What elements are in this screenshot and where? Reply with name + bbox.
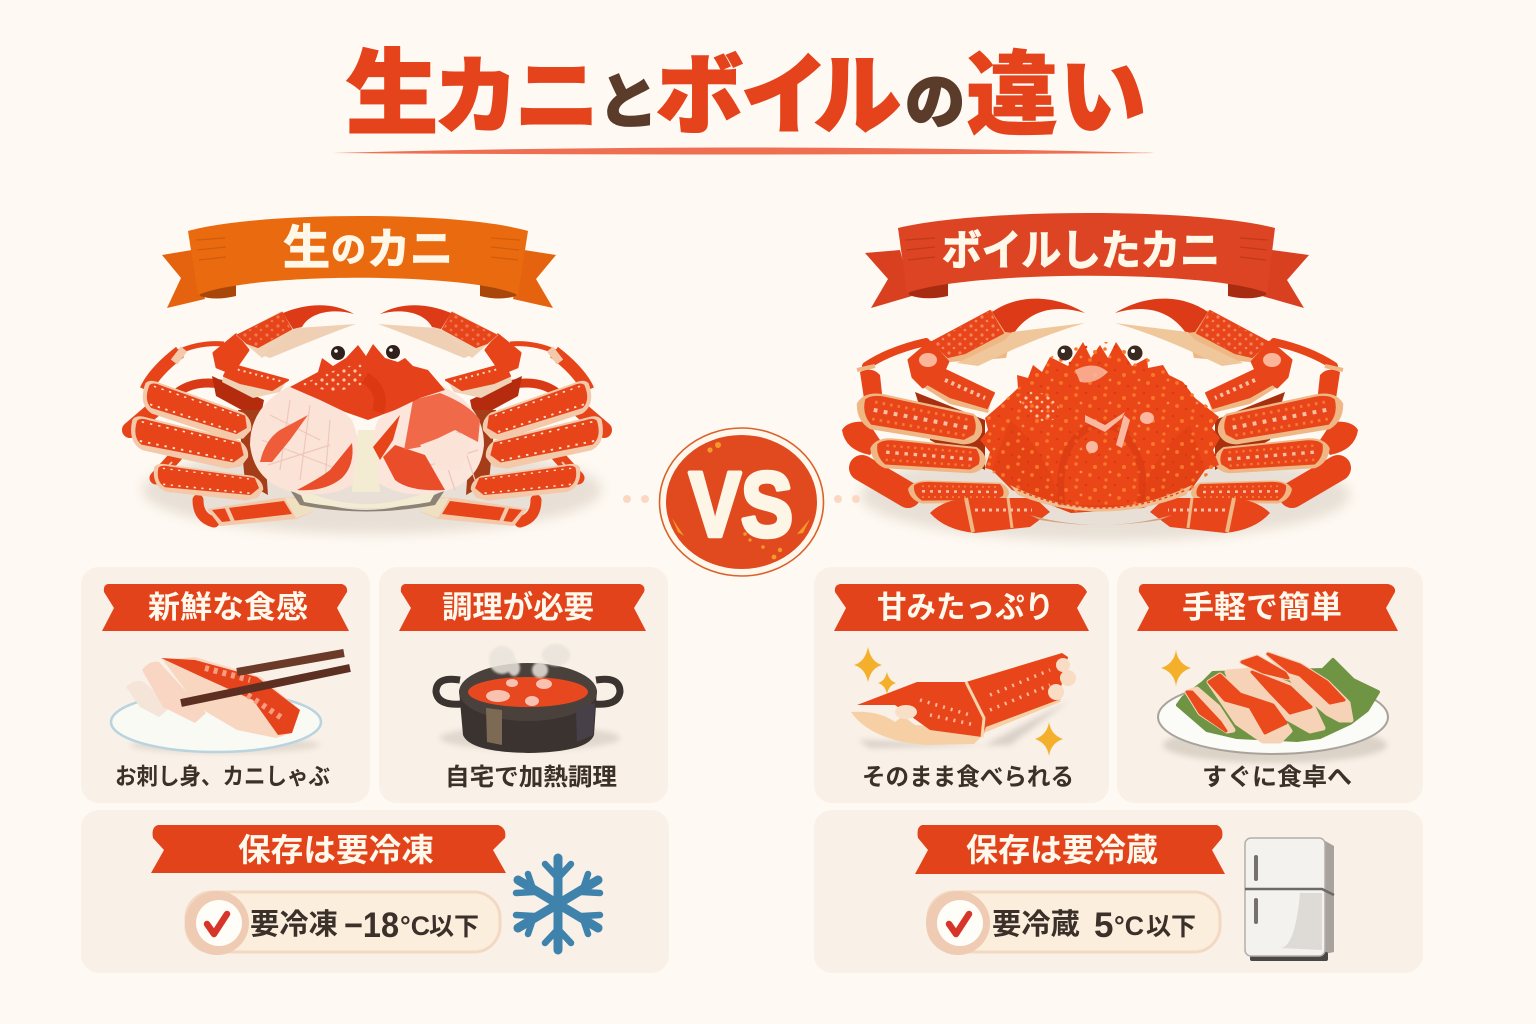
panel: fresh texture [81, 567, 370, 803]
icon: plated crab legs [1158, 650, 1388, 763]
ribbon: raw crab: カニ [367, 226, 453, 274]
heading ribbon [151, 825, 506, 873]
temperature pill: −18 [344, 906, 399, 945]
heading ribbon: 手軽で簡単 [1182, 590, 1342, 625]
title: ボイル [656, 48, 901, 145]
carapace highlights [1018, 365, 1154, 453]
heading ribbon: 保存は要冷蔵 [966, 832, 1158, 868]
vs badge [660, 428, 824, 576]
description: そのまま食べられる [862, 764, 1074, 791]
crab shell base [290, 490, 445, 512]
crab red carapace top [290, 344, 445, 420]
panel: frozen storage [81, 810, 669, 973]
icon: crab sashimi with chopsticks [111, 653, 350, 753]
temperature pill: °C [1114, 911, 1144, 941]
crab eyes [1058, 346, 1142, 360]
title: 違 [966, 45, 1058, 147]
ribbon: raw crab [162, 216, 556, 308]
ribbon: raw crab: 生 [283, 221, 330, 274]
description: 自宅で加熱調理 [445, 764, 617, 791]
crab: raw [126, 305, 608, 534]
crab left legs [126, 305, 356, 526]
title underline [333, 148, 1155, 154]
vs dots [623, 495, 860, 503]
title: い [1060, 50, 1146, 146]
heading ribbon: 調理が必要 [442, 590, 594, 625]
ribbon: raw crab: の [331, 231, 366, 270]
heading ribbon: 保存は要冷凍 [238, 832, 434, 868]
temperature pill: 要冷蔵 [992, 908, 1080, 941]
carapace highlight [300, 362, 380, 412]
temperature pill: 5 [1094, 906, 1113, 945]
ribbon: boiled crab [865, 213, 1309, 308]
crab carapace [980, 342, 1220, 525]
crab raw meat [250, 385, 484, 494]
panel: chilled storage [814, 810, 1423, 973]
icon: refrigerator [1245, 838, 1334, 961]
heading ribbon [915, 825, 1225, 874]
panel: needs cooking [379, 567, 668, 803]
crab eyes [331, 345, 400, 360]
icon: boiling pot [436, 644, 620, 753]
vs badge: VS [689, 454, 793, 556]
heading ribbon: 新鮮な食感 [148, 590, 308, 625]
icon: snowflake [516, 858, 600, 950]
temperature pill: 以下 [429, 913, 479, 941]
crab right legs [1115, 299, 1358, 533]
heading ribbon [834, 584, 1089, 631]
panel: sweet flavor [814, 567, 1109, 803]
temperature pill: °C [400, 911, 430, 941]
title: と [598, 69, 658, 136]
icon: boiled claw with sparkles [851, 647, 1076, 756]
crab: boiled [842, 299, 1358, 541]
panel: easy and simple [1117, 567, 1423, 803]
title: カニ [434, 50, 599, 144]
title: 生 [346, 44, 438, 146]
heading ribbon [1137, 584, 1398, 631]
temperature pill [926, 891, 1220, 955]
description: すぐに食卓へ [1202, 764, 1352, 791]
temperature pill: 以下 [1146, 913, 1196, 941]
temperature pill [185, 891, 500, 955]
badge sparkles [672, 442, 810, 559]
title: の [905, 69, 965, 136]
crab left legs [842, 299, 1085, 533]
heading ribbon: 甘みたっぷり [877, 590, 1054, 625]
heading ribbon [399, 584, 646, 631]
description: お刺し身、カニしゃぶ [115, 763, 330, 789]
ribbon: boiled crab: ボイルしたカニ [942, 227, 1220, 274]
crab right legs [378, 305, 608, 526]
heading ribbon [102, 584, 349, 631]
temperature pill: 要冷凍 [250, 908, 338, 941]
title [346, 44, 1146, 147]
